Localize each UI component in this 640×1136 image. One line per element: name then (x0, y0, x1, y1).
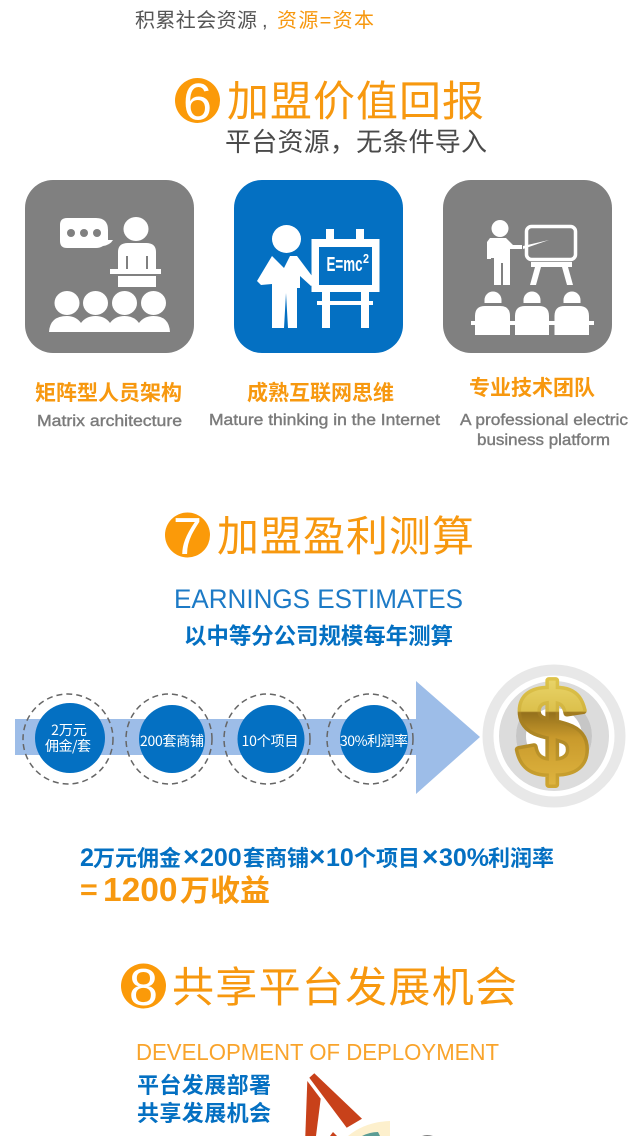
result: 1200 (103, 872, 178, 909)
earnings formula: 套商铺 (243, 846, 309, 871)
icon: gold dollar with rings: $ (517, 660, 587, 802)
caption: matrix architecture: 矩阵型人员架构 (35, 377, 182, 407)
caption: professional team (460, 372, 628, 449)
caption: matrix architecture: Matrix architecture (37, 413, 182, 430)
title: 加盟价值回报: 加盟价值回报 (227, 68, 484, 129)
number badge 7: 7 (173, 508, 202, 566)
number badge 7 (165, 508, 210, 566)
deployment text: 共享发展机会 (137, 1101, 271, 1126)
step 4: profit margin (327, 694, 413, 784)
caption: matrix architecture (35, 377, 182, 430)
caption: professional team: business platform (477, 432, 610, 449)
Chinese subtitle: 以中等分公司规模每年测算 (184, 619, 453, 651)
icon: audience of four (49, 291, 170, 332)
icon: easel with formula: 2 (363, 251, 369, 266)
earnings formula: 利润率 (488, 846, 554, 871)
intro line: , (262, 10, 268, 32)
arrow (15, 681, 480, 794)
step 2: shops: 200套商铺 (140, 731, 204, 751)
icon: seated audience (471, 292, 594, 335)
number badge 8 (121, 959, 166, 1017)
step 1: commission: 佣金/套 (45, 736, 91, 756)
title: 加盟盈利测算: 加盟盈利测算 (217, 503, 474, 564)
result: = (80, 866, 98, 910)
caption: mature internet thinking: Mature thinking in the Internet (209, 412, 441, 429)
step 1: commission: 2万元 (51, 720, 87, 740)
icon: presenter and board (487, 220, 576, 285)
number badge 6: 6 (183, 74, 212, 132)
earnings formula: 10 (326, 844, 354, 872)
earnings formula: 2 (80, 844, 94, 872)
intro line (135, 9, 374, 32)
section 7 heading (165, 503, 474, 651)
caption: mature internet thinking: 成熟互联网思维 (247, 377, 394, 407)
number badge 6 (175, 74, 220, 132)
section 6 heading (175, 68, 487, 159)
deployment text (137, 1073, 271, 1126)
earnings formula: 万元佣金 (93, 846, 181, 871)
earnings formula: × (183, 841, 199, 872)
caption: professional team: A professional electric (460, 412, 628, 429)
earnings formula (80, 841, 554, 910)
earnings formula: 个项目 (354, 846, 420, 871)
caption: professional team: 专业技术团队 (469, 372, 595, 402)
subtitle: 平台资源，无条件导入 (225, 122, 487, 159)
earnings formula: × (309, 841, 325, 872)
earnings formula: 30% (439, 844, 489, 872)
panel: internet thinking icon (234, 180, 403, 353)
intro line: 积累社会资源 (135, 9, 257, 32)
panel: matrix architecture icon (25, 180, 194, 353)
step 1: commission (23, 694, 113, 784)
section 8 heading (121, 954, 517, 1065)
title: 共享平台发展机会: 共享平台发展机会 (172, 954, 517, 1015)
English subtitle: EARNINGS ESTIMATES (174, 584, 463, 614)
step 3: projects: 10个项目 (242, 731, 298, 751)
icon: speech bubble (60, 218, 113, 248)
icon: gold dollar with rings (488, 660, 620, 802)
caption: mature internet thinking (209, 377, 441, 429)
number badge 8: 8 (129, 959, 158, 1017)
step 3: projects (224, 694, 310, 784)
icon: easel with formula (312, 229, 380, 328)
arrow flow diagram (15, 681, 480, 794)
icon: speaker at podium (110, 217, 161, 287)
intro line: 资源=资本 (277, 9, 374, 32)
step 4: profit margin: 30%利润率 (340, 731, 408, 751)
earnings formula: × (422, 841, 438, 872)
earnings formula: 200 (200, 844, 242, 872)
icon: easel with formula: E=mc (326, 254, 362, 276)
icon: teacher figure (257, 225, 329, 328)
step 2: shops (126, 694, 212, 784)
panel: professional team icon (443, 180, 612, 353)
result: 万收益 (180, 875, 270, 908)
cropped chart at page bottom (305, 1073, 433, 1136)
English subtitle: DEVELOPMENT OF DEPLOYMENT (136, 1039, 499, 1065)
deployment text: 平台发展部署 (137, 1073, 271, 1098)
